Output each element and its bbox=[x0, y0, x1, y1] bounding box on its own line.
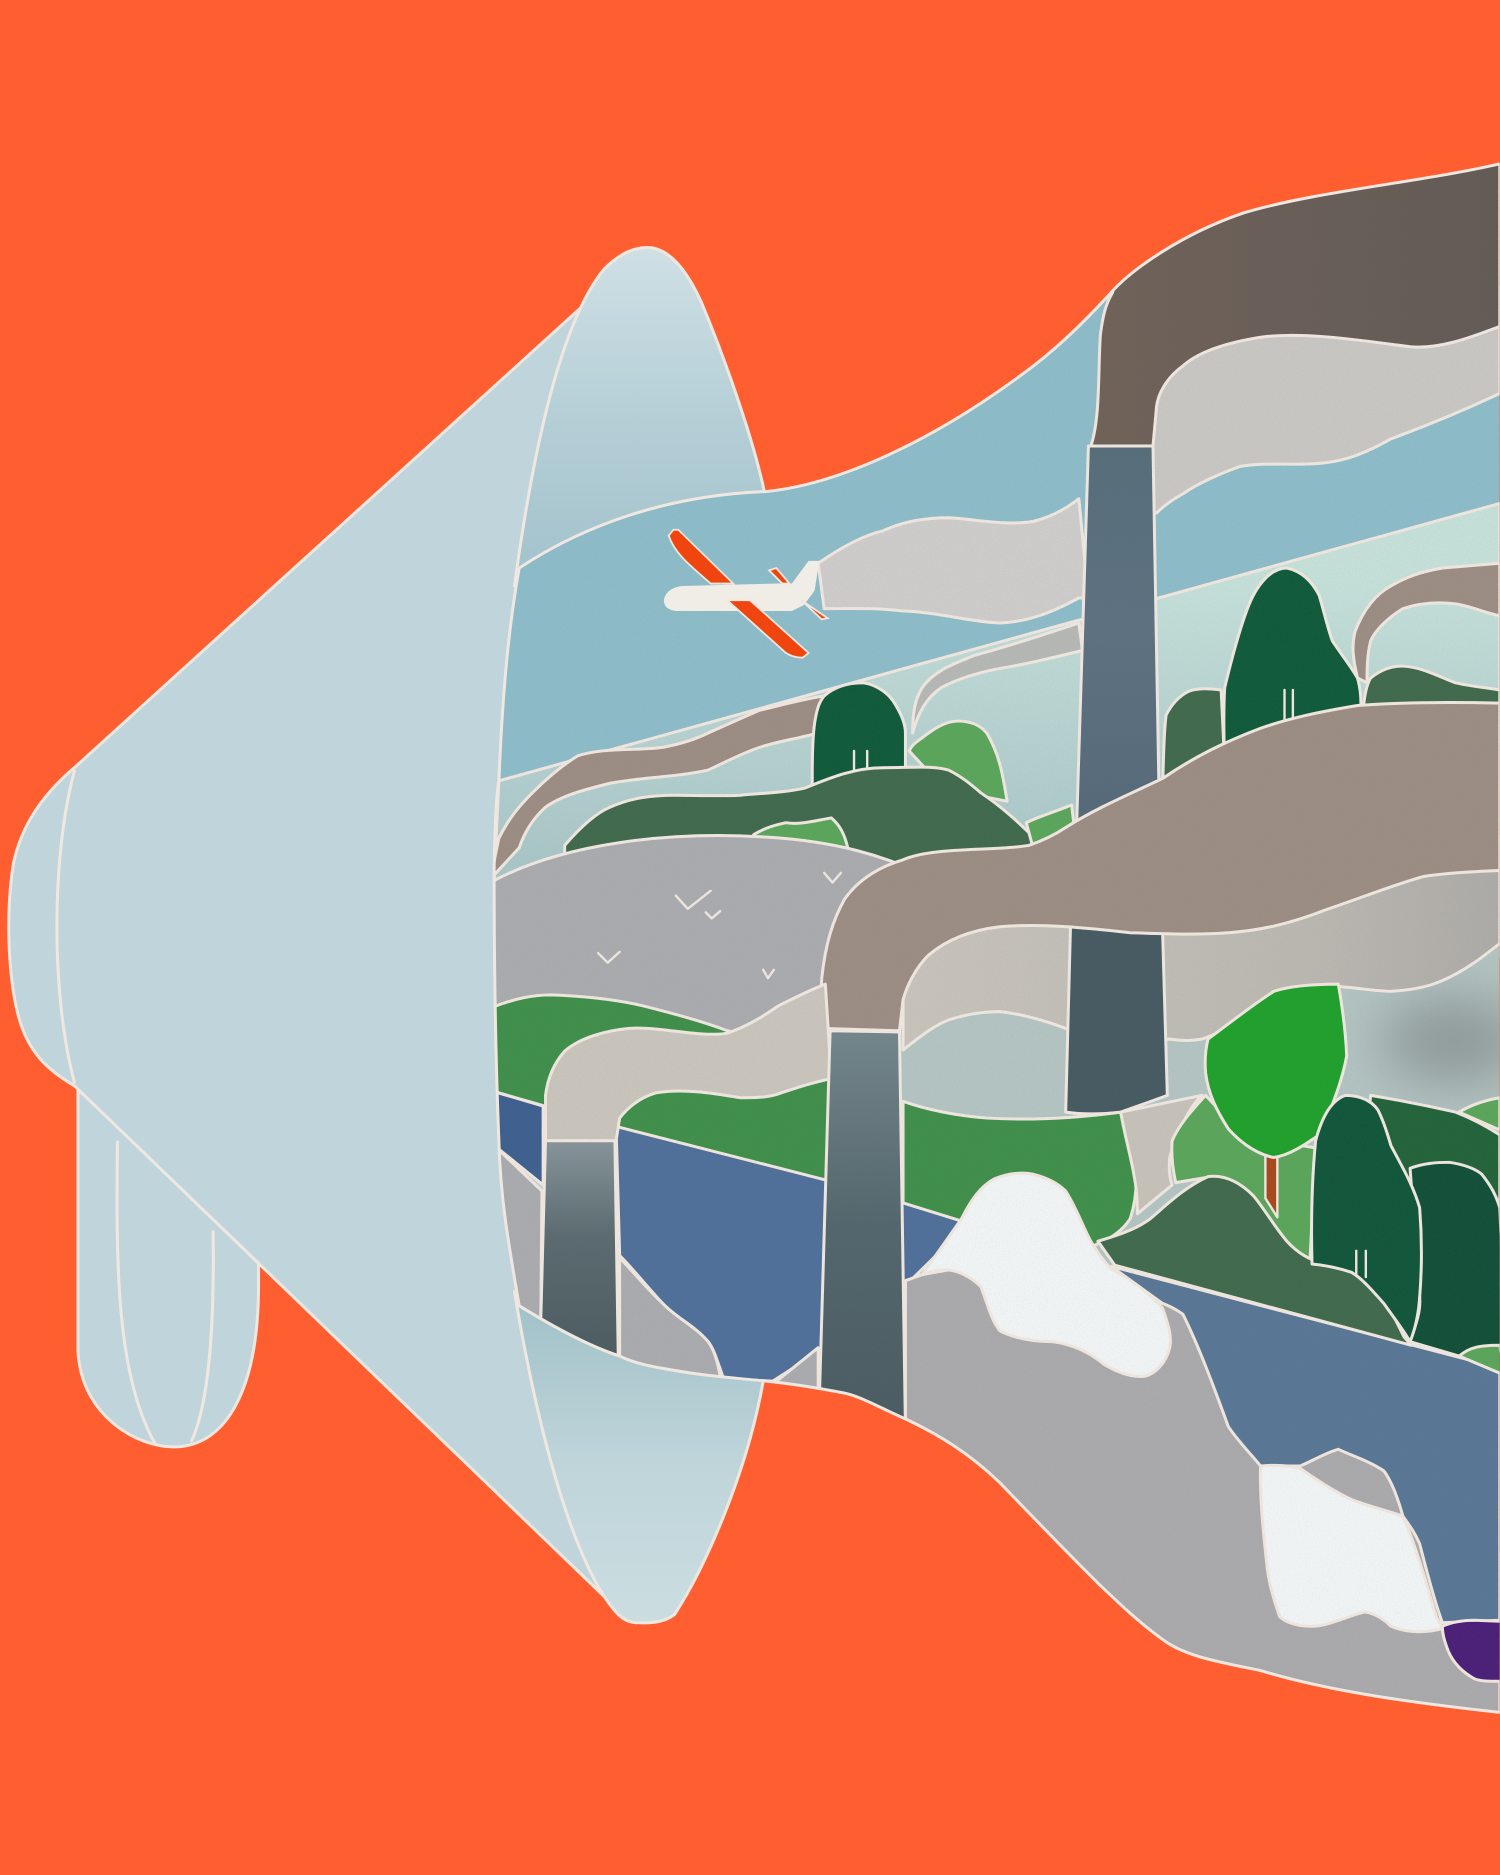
pale smoke left bbox=[546, 984, 831, 1141]
green hill left bbox=[491, 995, 837, 1190]
bush: beside tree bbox=[1162, 687, 1223, 778]
bush: bottom right bbox=[1459, 1345, 1500, 1375]
scene outline bbox=[494, 164, 1500, 1712]
grey-beige strip bbox=[1121, 1095, 1202, 1214]
mint haze band bbox=[491, 503, 1500, 957]
white cloud two bbox=[1260, 1465, 1442, 1632]
light smoke middle bbox=[903, 837, 1500, 1050]
megaphone handle bbox=[78, 1070, 259, 1447]
plane upper tail fin bbox=[769, 568, 789, 584]
grain texture overlay bbox=[479, 155, 1500, 1722]
tree: dark green right front bbox=[1312, 1095, 1421, 1342]
chimney: rear lower bbox=[1066, 927, 1167, 1114]
riverbank: small wedge bbox=[775, 1348, 818, 1399]
river right bbox=[1111, 1266, 1500, 1623]
plane contrail cloud bbox=[818, 499, 1088, 623]
megaphone cone body bbox=[9, 248, 670, 1623]
tree: dark green left bbox=[812, 683, 905, 799]
bush: mid green bbox=[909, 721, 1007, 801]
dark brown smoke top bbox=[1090, 164, 1500, 446]
left brown smoke bbox=[491, 696, 824, 879]
river: main bbox=[616, 1126, 831, 1381]
chimney: rear upper bbox=[1076, 446, 1159, 831]
dark green hill right back bbox=[1351, 1095, 1500, 1351]
right brown smoke bbox=[1353, 563, 1500, 683]
plane lower wing bbox=[727, 600, 809, 658]
grey bank base bbox=[905, 1270, 1500, 1722]
green field right of chimney bbox=[903, 1101, 1136, 1268]
grey hillside with sky bbox=[496, 834, 895, 1030]
plane body bbox=[664, 561, 819, 611]
hill: dark green bbox=[563, 766, 1030, 861]
tree: bright green bbox=[1205, 984, 1347, 1158]
sky bbox=[479, 155, 1500, 825]
small grey smoke bbox=[913, 623, 1082, 733]
chimney: left bbox=[541, 1141, 618, 1369]
light smoke upper bbox=[1124, 287, 1500, 513]
mist shadow bbox=[1381, 998, 1500, 1082]
plane lower tail fin bbox=[801, 600, 828, 619]
birds bbox=[598, 873, 841, 978]
river: left slice bbox=[498, 1092, 544, 1186]
megaphone mouth lower rim bbox=[514, 1291, 766, 1623]
riverbank: middle bbox=[620, 1258, 722, 1387]
tree trunk bbox=[1265, 1155, 1277, 1217]
right dark hill bbox=[1363, 666, 1500, 741]
bush: behind bright tree bbox=[1172, 1095, 1316, 1268]
plane upper wing bbox=[669, 530, 733, 584]
airplane bbox=[664, 530, 828, 658]
river strip bbox=[899, 1202, 969, 1291]
purple patch bbox=[1442, 1620, 1500, 1684]
megaphone mouth upper rim bbox=[514, 248, 789, 586]
landscape scene bbox=[479, 120, 1500, 1722]
tree: dark green right back bbox=[1410, 1162, 1500, 1375]
hill: dark green foreground bbox=[1098, 1176, 1411, 1345]
tree: tall dark green bbox=[1224, 568, 1361, 765]
white cloud one bbox=[922, 1173, 1170, 1377]
riverbank: left bbox=[493, 1144, 542, 1327]
bush: tiny right of hill bbox=[1026, 805, 1075, 849]
megaphone bbox=[9, 248, 789, 1623]
bush: far right bbox=[1459, 1098, 1500, 1130]
big brown smoke bbox=[821, 702, 1500, 1031]
mist region lower right bbox=[897, 921, 1500, 1315]
chimney: front bbox=[819, 1031, 905, 1429]
bush: small bright bbox=[754, 818, 848, 849]
